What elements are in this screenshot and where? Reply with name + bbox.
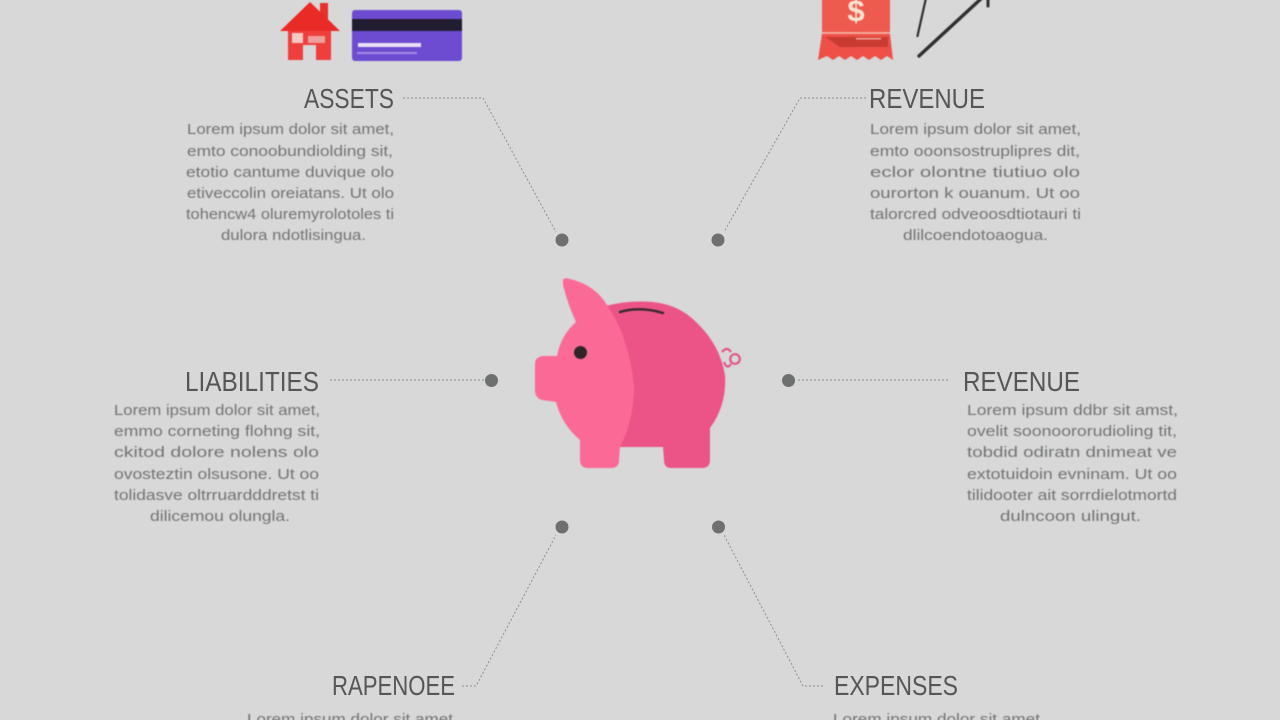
dot: revenue middle (782, 374, 795, 387)
panel: revenue middle (782, 366, 1178, 525)
dot: revenue top (712, 234, 724, 246)
icon: red receipt with dollar sign (818, 0, 893, 60)
text block: revenue middle description (967, 402, 1178, 525)
heading: expenses: EXPENSES (834, 670, 958, 701)
connector: liabilities (330, 379, 484, 381)
text block: liabilities description: emmo corneting flohng sit, (114, 423, 320, 440)
icon: red house (280, 2, 340, 61)
dot: rapenoee (556, 520, 568, 534)
icon: piggy bank (535, 278, 740, 468)
dot: expenses (712, 520, 725, 534)
text block: assets description: etotio cantume duvique olo (186, 164, 394, 181)
text block: assets description: tohencw4 oluremyrolotoles ti (186, 206, 394, 223)
text block: assets description: Lorem ipsum dolor sit amet, (187, 121, 394, 138)
panel: liabilities (114, 366, 498, 525)
pig tail (722, 349, 740, 367)
connector: rapenoee (462, 535, 556, 686)
icon: purple credit card (352, 10, 462, 61)
text block: assets description: etiveccolin oreiatans. Ut olo (187, 185, 394, 202)
text block: liabilities description: ovosteztin olsusone. Ut oo (114, 466, 319, 483)
panel: expenses (712, 520, 1041, 720)
text block: revenue middle description: tilidooter ait sorrdielotmortd (967, 487, 1177, 504)
text block: liabilities description: tolidasve oltrruardddretst ti (114, 487, 319, 504)
heading: revenue middle: REVENUE (963, 366, 1080, 397)
pig head and ear (535, 278, 634, 468)
text block: revenue top description: dlilcoendotoaogua. (903, 227, 1048, 244)
text block: liabilities description: dilicemou olungla. (150, 508, 290, 525)
text block: revenue middle description: Lorem ipsum ddbr sit amst, (967, 402, 1178, 419)
panel: rapenoee (247, 520, 568, 720)
text block: revenue top description: talorcred odveoosdtiotauri ti (870, 206, 1081, 223)
heading: revenue top: REVENUE (869, 83, 985, 114)
icon: growth arrow (918, 0, 988, 56)
heading: rapenoee: RAPENOEE (332, 670, 455, 701)
text block: revenue middle description: tobdid odiratn dnimeat ve (967, 444, 1177, 461)
text block: assets description: dulora ndotlisingua. (221, 227, 366, 244)
text block: revenue middle description: dulncoon ulingut. (1000, 508, 1141, 525)
text block: revenue top description: emto ooonsostruplipres dit, (870, 143, 1080, 160)
connector: revenue top (724, 98, 866, 232)
text block: revenue top description (870, 121, 1081, 244)
text block: revenue top description: Lorem ipsum dolor sit amet, (870, 121, 1081, 138)
heading: assets: ASSETS (304, 83, 394, 114)
connector: revenue middle (798, 379, 950, 381)
text block: revenue top description: eclor olontne tiutiuo olo (870, 164, 1080, 181)
text block: assets description (186, 121, 394, 244)
text block: revenue middle description: extotuidoin evninam. Ut oo (967, 466, 1177, 483)
dot: liabilities (485, 374, 498, 387)
connector: assets (403, 98, 556, 232)
text block: liabilities description: ckitod dolore nolens olo (114, 444, 319, 461)
text block: liabilities description: Lorem ipsum dolor sit amet, (114, 402, 320, 419)
panel: revenue top (712, 83, 1081, 246)
pig coin slot (620, 309, 663, 313)
text block: revenue top description: ourorton k ouanum. Ut oo (870, 185, 1080, 202)
dot: assets (556, 234, 568, 246)
heading: liabilities: LIABILITIES (185, 366, 319, 397)
pig body (605, 302, 725, 468)
text block: revenue middle description: ovelit soonoororudioling tit, (967, 423, 1177, 440)
text block: assets description: emto conoobundiolding sit, (187, 143, 393, 160)
connector: expenses (724, 535, 823, 686)
pig eye (574, 346, 587, 359)
text block: liabilities description (114, 402, 320, 525)
panel: assets (186, 83, 568, 246)
